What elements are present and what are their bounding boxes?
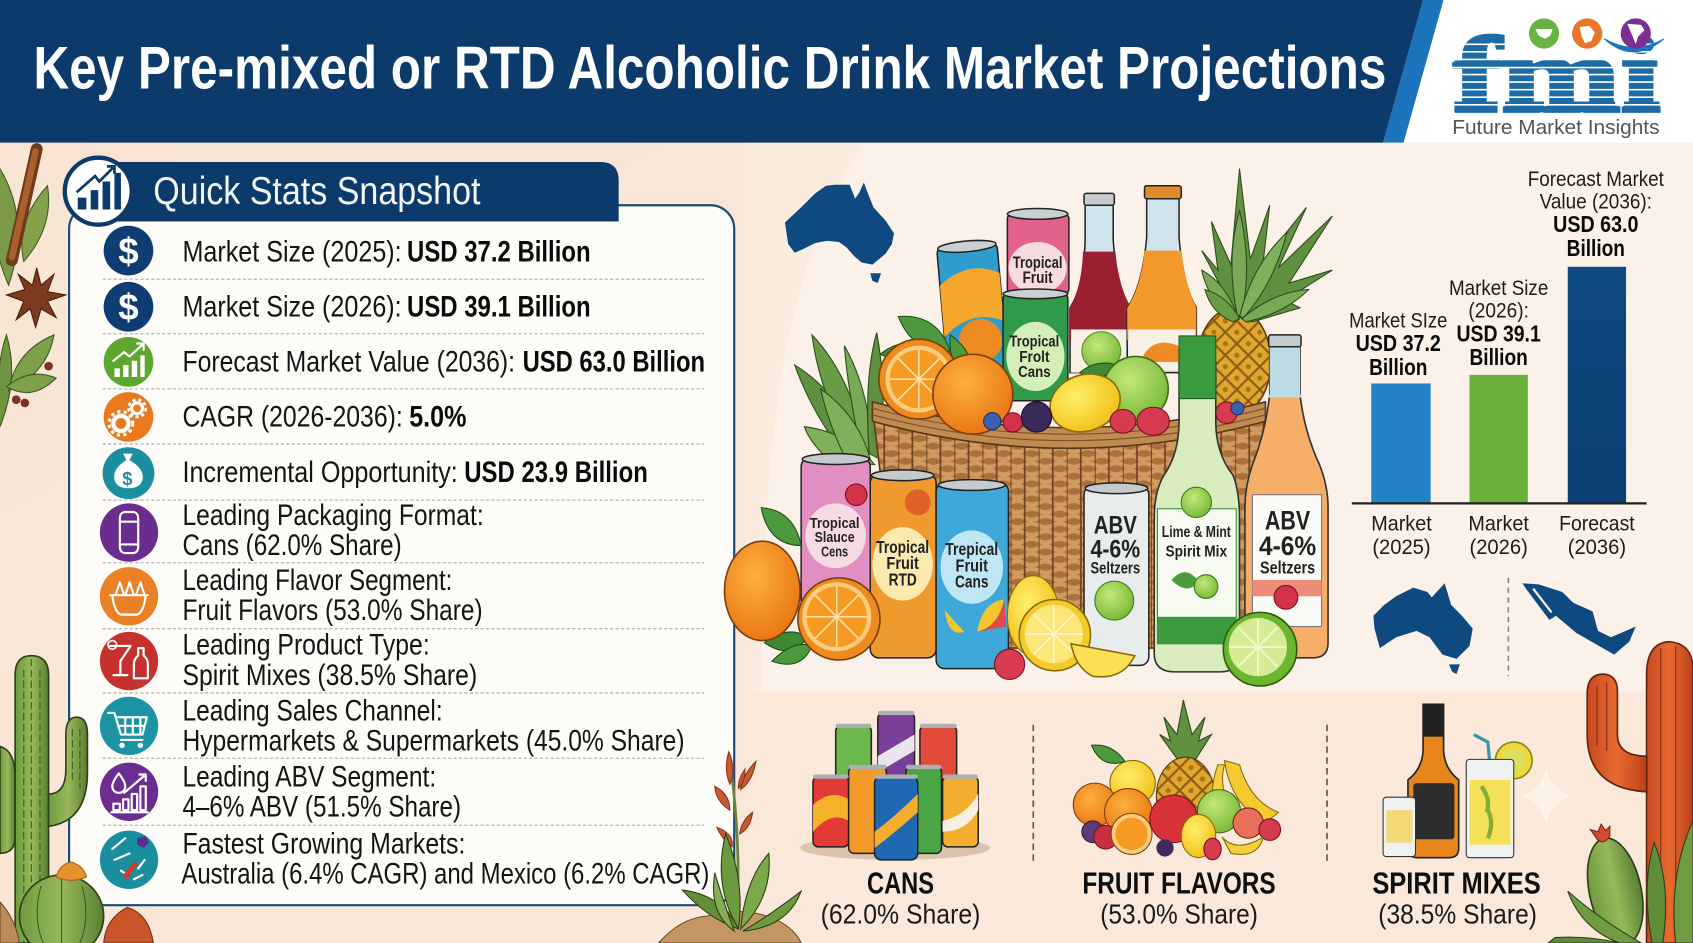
bar: market 2026: (2026): bbox=[1468, 298, 1529, 323]
bar: forecast 2036: (2036) bbox=[1568, 534, 1626, 559]
stat: leading ABV segment: 4–6% ABV (51.5% Share) bbox=[182, 792, 461, 824]
segment: spirit mixes bbox=[1383, 704, 1572, 858]
segment label: cans: CANS bbox=[867, 867, 934, 900]
segment label: spirit mixes bbox=[1372, 867, 1541, 930]
bar: market 2026: USD 39.1 bbox=[1457, 320, 1541, 346]
segment label: spirit mixes: (38.5% Share) bbox=[1378, 899, 1537, 930]
stat: leading sales channel: Leading Sales Channel: bbox=[182, 695, 443, 727]
bottle: ABV Seltzers orange: ABV bbox=[1265, 505, 1310, 535]
bar: forecast 2036: Billion bbox=[1567, 235, 1625, 261]
can: silver ABV Seltzers: 4-6% bbox=[1091, 536, 1140, 563]
can: pink Tropical Slauce Cens: Tropical bbox=[810, 515, 859, 532]
bar: market 2025: Market bbox=[1371, 510, 1432, 535]
stat: leading product type: Spirit Mixes (38.5% Share) bbox=[182, 660, 477, 692]
panel: bottom segment backdrop bbox=[745, 692, 1693, 943]
panel: quick stats snapshot bbox=[65, 158, 734, 905]
map: Australia lower bbox=[1373, 583, 1473, 674]
header banner bbox=[0, 0, 1693, 143]
bar: market 2026: Market Size bbox=[1449, 275, 1548, 300]
stat: leading ABV segment: Leading ABV Segment: bbox=[182, 761, 436, 793]
bar: market 2025: Billion bbox=[1369, 354, 1427, 380]
can: blue Trepical Fruit Cans: Trepical bbox=[945, 539, 998, 559]
can: pink Tropical Fruit: Fruit bbox=[1022, 269, 1053, 287]
stat: forecast market value: USD 63.0 Billion bbox=[523, 347, 705, 379]
stat: fastest growing markets: Fastest Growing Markets: bbox=[182, 828, 465, 860]
stat: leading flavor segment: Fruit Flavors (53.0% Share) bbox=[182, 595, 483, 627]
can: pink Tropical Slauce Cens bbox=[801, 454, 870, 609]
can: blue Trepical Fruit Cans: Fruit bbox=[956, 555, 988, 575]
can: pink Tropical Fruit bbox=[1007, 208, 1069, 295]
can: silver ABV Seltzers: Seltzers bbox=[1091, 560, 1140, 578]
stat: forecast market value: Forecast Market Value (2036): bbox=[182, 347, 515, 379]
fruit: orange whole bbox=[933, 354, 1013, 434]
segment: fruit flavors bbox=[1073, 700, 1281, 860]
bar: market 2026: Market bbox=[1468, 510, 1529, 535]
stat: market size 2026: $ bbox=[118, 287, 139, 328]
stat: forecast market value bbox=[104, 337, 705, 387]
bar: market 2025 bbox=[1349, 307, 1447, 559]
fruit: orange half front bbox=[798, 578, 880, 660]
can: silver ABV Seltzers bbox=[1084, 483, 1149, 665]
fruit: orange half bbox=[879, 339, 959, 419]
fruit: green apple bbox=[1103, 356, 1168, 421]
bar: market 2026 bbox=[1449, 275, 1548, 559]
map: Australia upper bbox=[785, 183, 894, 283]
bar: market 2025: Market SIze bbox=[1349, 307, 1447, 332]
bottle: Lime and Mint Spirit Mix bbox=[1154, 336, 1240, 672]
bar: forecast 2036: USD 63.0 bbox=[1553, 211, 1638, 237]
stat: incremental opportunity: USD 23.9 Billion bbox=[464, 457, 648, 489]
stat: leading flavor segment: Leading Flavor Segment: bbox=[182, 565, 452, 597]
can: green Tropical Fruit Cans: Frolt bbox=[1019, 349, 1050, 366]
bar chart: market projections bbox=[1349, 166, 1664, 559]
decoration: agave and red flower stalk bbox=[659, 752, 801, 943]
stat text: fastest growing markets detail: Australia (6.4% CAGR) and Mexico (6.2% CAGR) bbox=[181, 859, 709, 891]
fruit: berries bbox=[984, 402, 1244, 435]
stat: leading flavor segment bbox=[100, 565, 483, 627]
stat: CAGR bbox=[104, 392, 467, 442]
stat: leading packaging format bbox=[100, 500, 484, 562]
stat: incremental opportunity: Incremental Opportunity: bbox=[182, 457, 458, 489]
bar: market 2025: (2025) bbox=[1372, 534, 1431, 559]
can: orange Tropical Fruit RTD: Fruit bbox=[886, 553, 919, 573]
segment label: fruit flavors: (53.0% Share) bbox=[1100, 899, 1258, 930]
bar: forecast 2036: Forecast bbox=[1559, 510, 1635, 535]
map: Mexico bbox=[1522, 583, 1636, 655]
fruit: raspberry bbox=[994, 649, 1025, 679]
can: blue Trepical Fruit Cans bbox=[936, 480, 1008, 669]
segment label: cans: (62.0% Share) bbox=[821, 899, 980, 930]
stat: market size 2025 bbox=[104, 226, 591, 275]
can: silver ABV Seltzers: ABV bbox=[1094, 513, 1137, 540]
stat: CAGR: 5.0% bbox=[409, 402, 467, 434]
can: green Tropical Fruit Cans: Tropical bbox=[1010, 334, 1059, 351]
can: orange Tropical Fruit RTD: Tropical bbox=[876, 537, 929, 557]
logo: Future Market Insights bbox=[1447, 16, 1668, 139]
bottle: Lime and Mint Spirit Mix: Lime & Mint bbox=[1162, 524, 1231, 541]
bottle: ABV Seltzers orange: Seltzers bbox=[1260, 558, 1315, 578]
basket bbox=[872, 402, 1265, 648]
segment: cans bbox=[800, 713, 990, 860]
can: pink Tropical Slauce Cens: Cens bbox=[821, 543, 848, 560]
fruit: lemons bbox=[1007, 576, 1135, 677]
stat: leading ABV segment bbox=[100, 761, 461, 824]
logo: Future Market Insights: fmi bbox=[1453, 16, 1661, 135]
can: green Tropical Fruit Cans bbox=[1003, 289, 1068, 401]
bar: market 2025: USD 37.2 bbox=[1356, 330, 1441, 356]
can: blue Trepical Fruit Cans: Cans bbox=[955, 572, 988, 592]
hero illustration: basket of drinks and fruit bbox=[724, 169, 1332, 686]
segment label: fruit flavors bbox=[1082, 867, 1276, 930]
panel header: Quick Stats Snapshot: Quick Stats Snapshot bbox=[153, 170, 481, 213]
stat: market size 2026: Market Size (2026): bbox=[182, 291, 402, 323]
bar: market 2026: Billion bbox=[1469, 344, 1528, 370]
fruit: lime half bbox=[1223, 612, 1297, 686]
decoration: spices top-left bbox=[0, 149, 66, 427]
bottle: orange bbox=[1127, 186, 1196, 373]
can: orange Tropical Fruit RTD bbox=[870, 470, 936, 658]
bar: forecast 2036: Value (2036): bbox=[1540, 188, 1652, 213]
stat: leading sales channel: Hypermarkets & Supermarkets (45.0% Share) bbox=[182, 726, 685, 758]
stat: CAGR: CAGR (2026-2036): bbox=[182, 402, 403, 434]
stat: market size 2025: Market Size (2025): bbox=[182, 236, 402, 268]
sparkle bbox=[1520, 767, 1572, 825]
bar: market 2026: (2026) bbox=[1469, 534, 1528, 559]
stat: leading packaging format: Leading Packaging Format: bbox=[182, 500, 484, 532]
panel: hero illustration backdrop bbox=[745, 143, 1693, 692]
bottle: ABV Seltzers orange: 4-6% bbox=[1259, 531, 1316, 561]
stat: leading product type bbox=[100, 630, 477, 692]
can: green Tropical Fruit Cans: Cans bbox=[1018, 364, 1051, 381]
fruit: left orange bbox=[724, 541, 800, 641]
stat: market size 2026: USD 39.1 Billion bbox=[407, 291, 591, 323]
stat: incremental opportunity: $ bbox=[122, 468, 133, 489]
can: tilted blue bbox=[936, 238, 1008, 374]
pineapple leaves: left bbox=[795, 333, 883, 464]
leaves top-of-basket bbox=[880, 316, 1116, 380]
leaves: left fruit bbox=[761, 508, 812, 664]
segment label: spirit mixes: SPIRIT MIXES bbox=[1372, 867, 1541, 900]
stat: market size 2026 bbox=[104, 282, 591, 332]
panel header: Quick Stats Snapshot bbox=[65, 158, 619, 225]
bottle: Lime and Mint Spirit Mix: Spirit Mix bbox=[1166, 543, 1227, 560]
pineapple: right bbox=[1197, 169, 1332, 416]
segment label: fruit flavors: FRUIT FLAVORS bbox=[1082, 867, 1276, 900]
fruit: lemon bbox=[1043, 365, 1128, 441]
logo: Future Market Insights: Future Market Insights bbox=[1452, 116, 1660, 139]
title: Key Pre-mixed or RTD Alcoholic Drink Market Projections bbox=[33, 34, 1386, 102]
stat: fastest growing markets bbox=[100, 828, 465, 889]
stat: leading product type: Leading Product Type: bbox=[182, 630, 430, 662]
stat: market size 2025: $ bbox=[118, 231, 139, 272]
bottle: dark red bbox=[1070, 193, 1130, 373]
stat: leading packaging format: Cans (62.0% Share) bbox=[182, 530, 402, 562]
can: pink Tropical Slauce Cens: Slauce bbox=[815, 529, 855, 546]
decoration: red cactus and prickly pear bbox=[1548, 642, 1693, 943]
stat: incremental opportunity bbox=[103, 447, 648, 499]
bottle: ABV Seltzers orange bbox=[1245, 335, 1328, 658]
stat: leading sales channel bbox=[100, 695, 685, 758]
bar: forecast 2036: Forecast Market bbox=[1528, 166, 1664, 191]
can: orange Tropical Fruit RTD: RTD bbox=[889, 569, 917, 589]
segment label: cans bbox=[821, 867, 980, 930]
stat: market size 2025: USD 37.2 Billion bbox=[407, 236, 591, 268]
decoration: green saguaro and barrel cactus bbox=[0, 656, 153, 943]
bar: forecast 2036 bbox=[1528, 166, 1664, 559]
can: pink Tropical Fruit: Tropical bbox=[1013, 254, 1062, 272]
